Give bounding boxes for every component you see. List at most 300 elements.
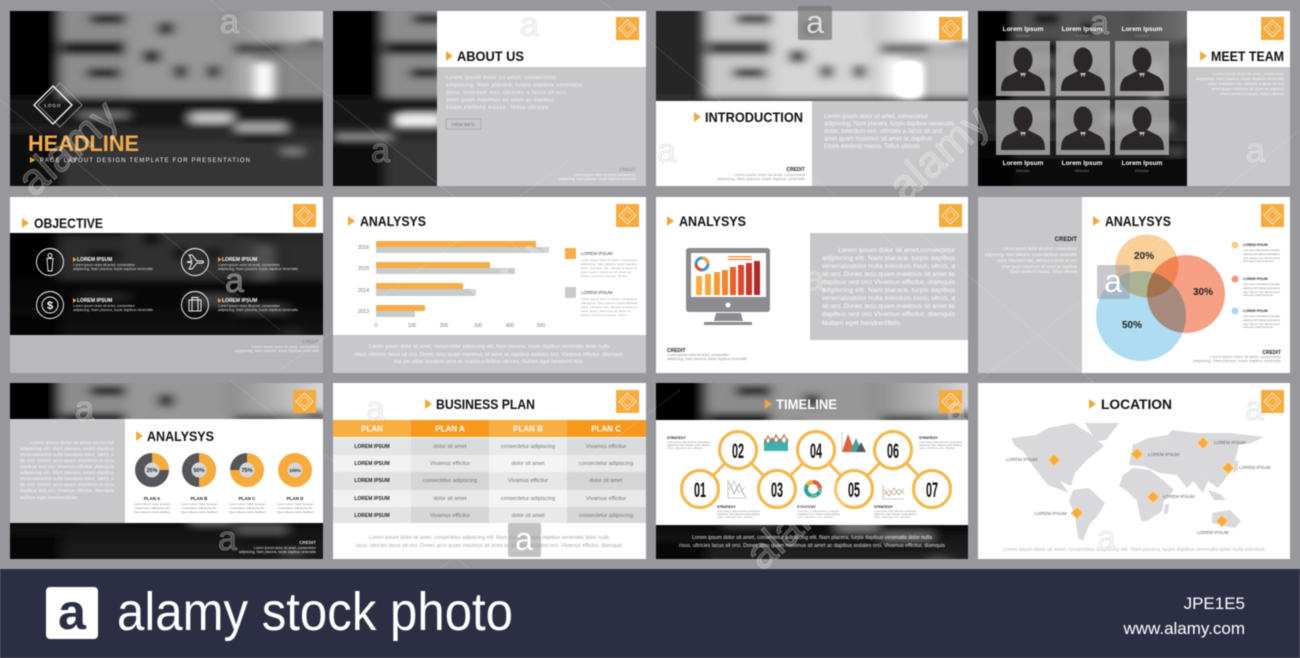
- bar chart: 2016: [358, 245, 369, 251]
- team portraits: [996, 41, 1169, 155]
- credit: adipiscing. Nam placera, turpis dapibus venenatis: [239, 550, 316, 554]
- bottom text: risus, ultricies lacus sit orci. Donec arcu quam maximus sit amet ac dapibus sodales orci. Vivamus efficitur, diamquis: [356, 543, 622, 549]
- strategy labels: dolor. Interdum nisi, ultricies: [919, 446, 956, 450]
- watermarks: a: [220, 3, 239, 41]
- credit: [559, 167, 637, 181]
- donut labels: consectetur adipiscing elit: [182, 506, 216, 510]
- slide: headline: [0, 0, 360, 221]
- strategy labels: STRATEGY: [919, 436, 938, 440]
- venn legend: Lorem ipsum dolor sit amet, consectetur: [1243, 248, 1280, 252]
- watermarks: a: [1090, 4, 1109, 42]
- slide: objective: [0, 163, 360, 403]
- heading: TIMELINE: [776, 396, 837, 412]
- logo diamond: LOGO: [44, 103, 62, 108]
- small chart: peaks: [842, 432, 866, 452]
- plan table: Vivamus efficitur: [586, 444, 626, 450]
- chart legend: amet quam maximus sit amet ac: [581, 270, 632, 274]
- credit right: adipiscing. Nam placera, turpis dapibus venenatis: [1193, 358, 1281, 363]
- bar chart: 2015: [358, 266, 369, 272]
- left text: Nullam eget hendreritfelis.: [20, 495, 78, 501]
- heading: ANALYSYS: [1105, 213, 1171, 229]
- watermarks: alamy: [8, 90, 128, 205]
- chart legend: amet quam maximus sit amet ac: [581, 309, 632, 313]
- alamy logo: [46, 584, 98, 640]
- plan table: Vivamus efficitur: [586, 496, 626, 502]
- venn legend: Lorem ipsum dolor sit amet, consectetur: [1243, 282, 1280, 286]
- heading: BUSINESS PLAN: [436, 396, 535, 412]
- team text: adipiscing. Nam placera, turpis dapibus venenatis: [1196, 76, 1284, 81]
- watermarks: a: [1246, 132, 1265, 170]
- strategy labels: dolor. Interdum nisi, ultricies: [797, 515, 834, 519]
- bar chart: 200: [440, 323, 448, 329]
- chart legend: dolor. Interdum nisi, ultricies a lacus sit: [581, 305, 637, 309]
- about text: Etiam eleifend massa. Tellus ultrices: [446, 105, 548, 111]
- plan table: LOREM IPSUM: [354, 496, 390, 502]
- watermarks: a: [657, 132, 676, 170]
- objective items: Lorem ipsum dolor sit amet, consectetur: [218, 303, 281, 308]
- strategy labels: STRATEGY: [797, 505, 816, 509]
- team names: Lorem Ipsum: [1062, 26, 1103, 33]
- objective items: Lorem ipsum dolor sit amet, consectetur: [73, 262, 136, 267]
- text block: sit orci. Donec arcu quam maximus sit amet ac: [822, 271, 956, 278]
- venn legend: LOREM IPSUM: [1243, 243, 1268, 247]
- watermarks: a: [366, 390, 385, 428]
- bottom text: Lorem ipsum dolor sit amet, consectetur adipiscing elit. Nam placera, turpis dapibus venenatis dolor nulla: [369, 535, 609, 541]
- donut labels: Nam placera turpis dapibus: [277, 510, 314, 514]
- icon: dollar: [36, 292, 64, 318]
- credit: Lorem ipsum dolor sit amet, consectetur: [574, 173, 637, 177]
- bar chart: 2013: [358, 309, 369, 315]
- slide: introduction: [626, 0, 1006, 221]
- heading: ANALYSYS: [360, 213, 426, 229]
- left text: sit orci. Donec arcu quam maximus et arcu: [20, 482, 114, 488]
- small chart: line: [728, 480, 747, 498]
- credit: CREDIT: [299, 540, 316, 545]
- plan table: LOREM IPSUM: [354, 461, 390, 467]
- icon: dollar: $: [47, 300, 53, 312]
- bottom text: nisi per vitae tincidunt urna ac massa a finibus ultrices. Nullam eget hendrerit felis.: [394, 359, 584, 365]
- slide: analysis monitor: [656, 197, 968, 373]
- credit: [239, 540, 317, 554]
- donut labels: Lorem ipsum dolor sit amet: [229, 502, 265, 506]
- watermarks: alamy: [444, 222, 564, 337]
- plan table: Vivamus efficitur: [430, 513, 470, 519]
- team text: Etiam eleifend massa. Tellus ultrices: [1220, 91, 1284, 96]
- heading: OBJECTIVE: [34, 215, 103, 231]
- credit left: adipiscing. Nam placera, turpis dapibus venenatis: [985, 252, 1077, 257]
- donut labels: Nam placera turpis dapibus: [229, 510, 266, 514]
- plan table: consectetur adipiscing: [423, 478, 477, 484]
- team text: Lorem ipsum dolor sit amet, consectetur: [1213, 71, 1285, 76]
- strategy labels: STRATEGY: [717, 505, 736, 509]
- icon: briefcase: [182, 292, 208, 318]
- chart legend: adipiscing. Nam placera, turpis dapibus: [581, 262, 638, 266]
- watermarks: a: [805, 260, 824, 298]
- location labels: LOREM IPSUM: [1197, 530, 1229, 535]
- bar chart: 500: [537, 323, 545, 329]
- venn legend: LOREM IPSUM: [1243, 309, 1268, 313]
- credit: CREDIT: [667, 348, 686, 354]
- intro text: amet quam maximus sit amet ac dapibus: [824, 136, 932, 142]
- plan table: consectetur adipiscing: [579, 513, 633, 519]
- plan table: PLAN B: [513, 424, 543, 434]
- heading: ANALYSYS: [679, 213, 746, 229]
- slide: location: [978, 383, 1290, 559]
- team names: Director: [1075, 168, 1090, 173]
- strategy labels: Lorem ipsum dolor sit amet, consectetur: [874, 509, 917, 513]
- venn legend: adipiscing. Nam placera, turpis dapibus: [1243, 252, 1281, 256]
- donut labels: consectetur adipiscing elit: [135, 506, 169, 510]
- objective items: adipiscing. Nam placera, turpis dapibus venenatis: [73, 266, 153, 271]
- watermarks: a: [515, 521, 533, 557]
- chart legend: Etiam eleifend massa. Tellus: [581, 274, 628, 278]
- image id: JPE1E5: [1184, 594, 1245, 613]
- left text: adipiscing elit. Nam placera, turpis dapibus: [20, 446, 115, 452]
- intro text: Etiam eleifend massa. Tellus ultrices: [824, 144, 920, 150]
- plan table: dolor sit amet: [589, 478, 623, 484]
- brand name: alamy stock photo: [117, 582, 513, 642]
- credit left: Etiam eleifend massa. Tellus ultrices: [1010, 269, 1077, 274]
- chart legend: Etiam eleifend massa. Tellus: [581, 313, 628, 317]
- timeline circles: 07: [926, 479, 938, 502]
- plan table: PLAN A: [435, 424, 465, 434]
- strategy labels: Lorem ipsum dolor sit amet, consectetur: [717, 509, 760, 513]
- donut labels: Nam placera turpis dapibus: [134, 510, 171, 514]
- credit: adipiscing. Nam placera, turpis dapibus venenatis: [559, 177, 636, 181]
- intro text: dolor. Interdum nisi, ultricies a lacus sit orci: [824, 129, 942, 135]
- location labels: LOREM IPSUM: [1239, 465, 1271, 470]
- watermarks: alamy: [879, 96, 999, 211]
- venn legend: adipiscing. Nam placera, turpis dapibus: [1243, 286, 1281, 290]
- credit: Lorem ipsum dolor sit amet, consectetur: [251, 345, 320, 349]
- venn legend: dolor. Interdum nisi, ultricies a lacus: [1243, 256, 1281, 260]
- timeline circles: 01: [694, 479, 706, 502]
- credit: Lorem ipsum dolor sit amet, consectetur: [254, 546, 317, 550]
- credit: [667, 348, 747, 361]
- location labels: LOREM IPSUM: [1214, 440, 1246, 445]
- timeline circles: 05: [848, 479, 860, 502]
- plan table: [333, 420, 646, 523]
- chart legend: LOREM IPSUM: [581, 290, 613, 295]
- heading: ABOUT US: [457, 48, 524, 64]
- timeline circles: 04: [810, 440, 822, 463]
- heading: ANALYSYS: [147, 428, 214, 444]
- credit: Lorem ipsum dolor sit amet, consectetur: [667, 352, 730, 357]
- donut labels: PLAN A: [144, 496, 161, 501]
- team text: [1196, 71, 1285, 96]
- left text: venenatisdolor nulla interdum risus, ultrici, a: [20, 476, 114, 482]
- text block: adipiscing elit. Nam placera, turpis dapibus: [822, 255, 956, 262]
- plan table: Vivamus efficitur: [508, 478, 548, 484]
- plan table: dolor sit amet: [511, 513, 545, 519]
- about text: amet quam maximus sit amet ac dapibus: [446, 98, 554, 104]
- plan table: consectetur adipiscing: [501, 496, 555, 502]
- venn legend: LOREM IPSUM: [1243, 277, 1268, 281]
- credit: [235, 339, 320, 353]
- about text: Lorem ipsum dolor sit amet, consectetur: [446, 75, 556, 81]
- plan table: PLAN C: [591, 424, 621, 434]
- slide: timeline: [626, 353, 1006, 630]
- donut charts: 75%: [241, 468, 253, 474]
- icon: person: [36, 248, 64, 276]
- objective items: adipiscing. Nam placera, turpis dapibus venenatis: [73, 307, 153, 312]
- donut labels: PLAN B: [191, 496, 208, 501]
- objective items: adipiscing. Nam placera, turpis dapibus venenatis: [218, 307, 298, 312]
- chart legend: adipiscing. Nam placera, turpis dapibus: [581, 301, 638, 305]
- team text: dolor. Interdum nisi, ultricies a lacus sit orci: [1208, 81, 1284, 86]
- objective items: LOREM IPSUM: [222, 298, 257, 304]
- left text: dapibus sed orci Vivamus efficitur, diamquis: [20, 488, 115, 494]
- website: www.alamy.com: [1122, 619, 1245, 638]
- text block: venenatisdolor nulla interdum risus, ultrici, a: [822, 263, 955, 270]
- small chart: bars: [764, 435, 788, 451]
- left text: adipiscing elit. Nam placera, turpis dapibus: [20, 470, 115, 476]
- plan table: LOREM IPSUM: [354, 513, 390, 519]
- strategy labels: dolor. Interdum nisi, ultricies: [717, 515, 754, 519]
- credit left: dolor. Interdum nisi, ultricies a lacus sit orci: [997, 258, 1077, 263]
- donut labels: Lorem ipsum dolor sit amet: [277, 502, 313, 506]
- strategy labels: [667, 436, 963, 519]
- plan table: PLAN: [361, 424, 383, 434]
- logo diamond: [34, 83, 82, 127]
- donut charts: 25%: [146, 468, 158, 474]
- venn diagram: [1096, 234, 1225, 361]
- plan table: consectetur adipiscing: [579, 461, 633, 467]
- small chart: donut: [806, 482, 820, 496]
- heading: MEET TEAM: [1211, 48, 1284, 64]
- slide: analysis donuts: [0, 353, 360, 623]
- donut labels: PLAN D: [287, 496, 304, 501]
- credit: CREDIT: [786, 167, 805, 173]
- slide: meet team: [957, 0, 1290, 221]
- text block: venenatisdolor nulla interdum risus, ultrici, a: [822, 295, 955, 302]
- location labels: LOREM IPSUM: [1035, 511, 1067, 516]
- team names: Director: [1016, 168, 1031, 173]
- left text: sit orci. Donec arcu quam maximus et arcu: [20, 458, 114, 464]
- strategy labels: adipiscing. Nam placera, turpis dapibus: [919, 443, 963, 447]
- text block: adipiscing elit. Nam placera, turpis dapibus: [822, 287, 956, 294]
- bottom text: risus, ultricies lacus sit orci. Donec arcu quam maximus sit amet ac dapibus sodales orci. Vivamus efficitur, diamquis: [355, 352, 623, 358]
- team names: Lorem Ipsum: [1122, 26, 1163, 33]
- view info button: VIEW INFO: [451, 122, 475, 127]
- text block: Lorem ipsum dolor sit amet,consectetur: [838, 247, 956, 254]
- text block: dapibus sed orci Vivamus efficitur, diamquis: [822, 311, 956, 318]
- team text: amet quam maximus sit amet ac dapibus: [1211, 86, 1284, 91]
- donut charts: 100%: [289, 468, 301, 473]
- about text: adipiscing. Nam placera, turpis dapibus venenatis: [446, 82, 582, 88]
- venn legend: amet quam maximus sit amet: [1243, 259, 1273, 263]
- bottom text: Lorem ipsum dolor sit amet, consectetur adipiscing elit. Nam placera, turpis dapibus venenatis dolor nulla: [369, 344, 609, 350]
- credit: CREDIT: [302, 339, 319, 344]
- chart legend: LOREM IPSUM: [581, 251, 613, 256]
- left text: dapibus sed orci Vivamus efficitur, diamquis: [20, 464, 115, 470]
- slide: about us: [303, 0, 683, 221]
- world map: [1011, 423, 1264, 541]
- team names: Director: [1135, 168, 1150, 173]
- credit right: Lorem ipsum dolor sit amet, consectetur: [1210, 354, 1282, 359]
- timeline circles: 03: [771, 479, 783, 502]
- strategy labels: adipiscing. Nam placera, turpis dapibus: [717, 512, 761, 516]
- view info button: [446, 119, 481, 129]
- credit left: [985, 237, 1078, 274]
- location labels: LOREM IPSUM: [1163, 494, 1195, 499]
- bar chart: 400: [506, 323, 514, 329]
- intro text: [824, 114, 954, 150]
- strategy labels: STRATEGY: [667, 436, 686, 440]
- objective items: Lorem ipsum dolor sit amet, consectetur: [73, 303, 136, 308]
- credit right: [1193, 350, 1282, 363]
- bar chart: 0: [375, 323, 378, 329]
- watermarks: a: [75, 390, 94, 428]
- plan table: LOREM IPSUM: [354, 478, 390, 484]
- heading: INTRODUCTION: [705, 109, 803, 125]
- donut charts: 50%: [193, 468, 205, 474]
- donut labels: consectetur adipiscing elit: [278, 506, 312, 510]
- location markers: [1048, 437, 1234, 527]
- credit: adipiscing. Nam placera, turpis dapibus venenatis: [235, 349, 319, 353]
- bottom text: risus, ultricies lacus sit orci. Donec arcu quam maximus sit amet ac dapibus sodales orci. Vivamus efficitur, diamquis: [679, 543, 945, 549]
- left text: Lorem ipsum dolor sit amet consectet: [30, 440, 115, 446]
- team names: Lorem Ipsum: [1003, 160, 1044, 167]
- watermarks: a: [947, 391, 966, 429]
- headline text: HEADLINE: [28, 131, 139, 156]
- bar chart: 300: [474, 323, 482, 329]
- watermarks: a: [218, 520, 237, 558]
- venn legend: Lorem ipsum dolor sit amet, consectetur: [1243, 314, 1280, 318]
- timeline circles: [682, 432, 950, 508]
- chart legend: [565, 248, 638, 317]
- donut labels: Lorem ipsum dolor sit amet: [134, 502, 170, 506]
- location labels: [1006, 440, 1271, 535]
- slide: business plan: [333, 383, 646, 559]
- team names: Lorem Ipsum: [1062, 160, 1103, 167]
- donut labels: consectetur adipiscing elit: [230, 506, 264, 510]
- team names: Lorem Ipsum: [1122, 160, 1163, 167]
- strategy labels: adipiscing. Nam placera, turpis dapibus: [874, 512, 918, 516]
- bottom text: [356, 535, 622, 549]
- venn legend: dolor. Interdum nisi, ultricies a lacus: [1243, 290, 1281, 294]
- donut charts: [135, 453, 312, 487]
- text block: Nullam eget hendreritfelis.: [822, 320, 902, 327]
- plan table: consectetur adipiscing: [501, 444, 555, 450]
- team names: [1003, 26, 1163, 173]
- timeline circles: 06: [887, 440, 899, 463]
- venn legend: amet quam maximus sit amet: [1243, 293, 1273, 297]
- plan table: dolor sit amet: [433, 444, 467, 450]
- credit: [717, 167, 806, 181]
- chart legend: Lorem ipsum dolor sit amet, consectetur: [581, 297, 637, 301]
- credit: CREDIT: [619, 167, 636, 172]
- intro text: adipiscing. Nam placera, turpis dapibus venenatis: [824, 122, 954, 128]
- watermarks: a: [225, 262, 244, 300]
- bottom text: Lorem ipsum dolor sit amet, consectetur adipiscing elit. Nam placera, turpis dapibus venenatis dolor nulla interdum: [1003, 547, 1265, 553]
- credit: adipiscing. Nam placera, turpis dapibus venenatis: [717, 176, 805, 181]
- venn diagram: 30%: [1193, 287, 1213, 298]
- strategy labels: adipiscing. Nam placera, turpis dapibus: [667, 443, 711, 447]
- bottom text: [355, 344, 623, 365]
- location labels: LOREM IPSUM: [1006, 457, 1038, 462]
- donut labels: Lorem ipsum dolor sit amet: [181, 502, 217, 506]
- bar chart: 2014: [358, 288, 369, 294]
- text block: dapibus sed orci Vivamus efficitur, diamquis: [822, 279, 956, 286]
- plan table: Vivamus efficitur: [430, 461, 470, 467]
- venn legend: dolor. Interdum nisi, ultricies a lacus: [1243, 322, 1281, 326]
- objective items: adipiscing. Nam placera, turpis dapibus venenatis: [218, 266, 298, 271]
- timeline circles: 02: [732, 440, 744, 463]
- credit: Lorem ipsum dolor sit amet, consectetur: [734, 172, 806, 177]
- strategy labels: Lorem ipsum dolor sit amet, consectetur: [667, 440, 710, 444]
- bar chart: 100: [408, 323, 416, 329]
- donut labels: [134, 496, 314, 514]
- left text: [20, 440, 115, 501]
- venn legend: [1232, 242, 1281, 329]
- intro text: Lorem ipsum dolor sit amet, consectetur: [824, 114, 928, 120]
- team names: Director: [1016, 33, 1031, 38]
- credit left: CREDIT: [1055, 237, 1077, 243]
- text block: [822, 247, 956, 327]
- subtitle: PAGE LAYOUT DESIGN TEMPLATE FOR PRESENTATION: [40, 158, 250, 164]
- slide: analysis bar chart: [333, 197, 646, 373]
- about text: [446, 75, 582, 111]
- watermarks: a: [1245, 390, 1264, 428]
- watermarks: alamy: [736, 464, 856, 579]
- objective items: LOREM IPSUM: [222, 257, 257, 263]
- donut labels: Nam placera turpis dapibus: [181, 510, 218, 514]
- strategy labels: Lorem ipsum dolor sit amet, consectetur: [797, 509, 840, 513]
- watermarks: a: [371, 132, 390, 170]
- objective items: [73, 257, 298, 312]
- plan table: dolor sit amet: [433, 496, 467, 502]
- strategy labels: Lorem ipsum dolor sit amet, consectetur: [919, 440, 962, 444]
- alamy logo: a: [58, 584, 87, 640]
- icon: monitor with chart: [686, 248, 770, 325]
- watermarks: a: [520, 6, 539, 44]
- watermarks: a: [1104, 263, 1122, 299]
- objective items: LOREM IPSUM: [77, 298, 112, 304]
- objective items: LOREM IPSUM: [77, 257, 112, 263]
- objective items: Lorem ipsum dolor sit amet, consectetur: [218, 262, 281, 267]
- credit left: amet quam maximus sit amet ac dapibus: [1001, 264, 1077, 269]
- chart legend: dolor. Interdum nisi, ultricies a lacus sit: [581, 266, 637, 270]
- credit left: Lorem ipsum dolor sit amet, consectetur: [1003, 246, 1078, 251]
- credit: adipiscing. Nam placera, turpis dapibus venenatis: [667, 356, 747, 361]
- donut labels: PLAN C: [239, 496, 256, 501]
- strategy labels: dolor. Interdum nisi, ultricies: [667, 446, 704, 450]
- bar chart: [358, 241, 549, 329]
- text block: sit orci. Donec arcu quam maximus sit amet ac: [822, 303, 956, 310]
- location labels: LOREM IPSUM: [1148, 452, 1180, 457]
- venn legend: adipiscing. Nam placera, turpis dapibus: [1243, 318, 1281, 322]
- bottom text: Lorem ipsum dolor sit amet, consectetur adipiscing elit. Nam placera, turpis dapibus venenatis dolor nulla: [692, 535, 932, 541]
- about text: dolor. Interdum nisi, ultricies a lacus sit orci: [446, 90, 566, 96]
- small chart: multi-line: [883, 485, 904, 499]
- team names: Lorem Ipsum: [1003, 26, 1044, 33]
- heading: LOCATION: [1101, 396, 1172, 412]
- strategy labels: dolor. Interdum nisi, ultricies: [874, 515, 911, 519]
- venn legend: amet quam maximus sit amet: [1243, 325, 1273, 329]
- watermarks: a: [1097, 519, 1116, 557]
- bottom text: [679, 535, 945, 549]
- watermarks: a: [806, 4, 824, 40]
- chart legend: Lorem ipsum dolor sit amet, consectetur: [581, 258, 637, 262]
- venn diagram: 20%: [1134, 251, 1154, 262]
- venn diagram: 50%: [1122, 320, 1142, 331]
- plan table: dolor sit amet: [511, 461, 545, 467]
- slide: analysis venn: [978, 197, 1290, 373]
- credit right: CREDIT: [1262, 350, 1281, 356]
- icon: plane: [182, 248, 208, 276]
- strategy labels: STRATEGY: [874, 505, 893, 509]
